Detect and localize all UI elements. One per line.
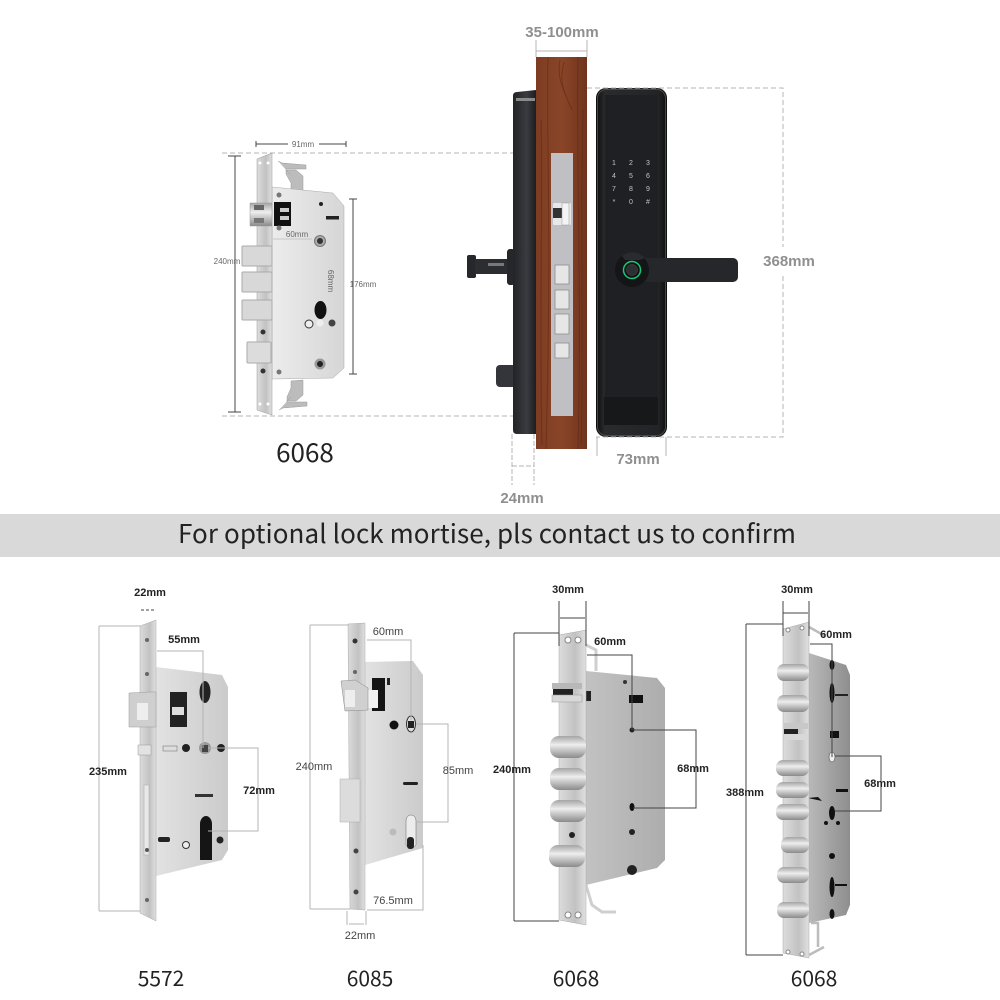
dimension: 176mm xyxy=(349,199,377,374)
fingerprint sensor xyxy=(624,262,640,278)
keypad digits: # xyxy=(646,199,650,206)
dimension: 30mm xyxy=(781,584,813,636)
icon: mortise 6085 case xyxy=(365,661,423,865)
dimension: 60mm xyxy=(810,629,852,757)
keypad digits: 5 xyxy=(629,173,633,180)
banner: optional lock mortise notice xyxy=(0,514,1000,557)
dimension: 22mm: 22mm xyxy=(345,930,375,942)
dimension: 55mm: 55mm xyxy=(168,634,200,646)
dimension: 85mm xyxy=(416,724,473,822)
dimension: 60mm xyxy=(587,636,632,730)
dimension: 22mm xyxy=(345,911,375,942)
diagram: lock mortise 6068 dimensions xyxy=(214,140,513,470)
mortise bolts xyxy=(555,265,569,358)
dimension: 60mm: 60mm xyxy=(820,629,852,641)
dimension: 68mm: 68mm xyxy=(677,763,709,775)
dimension: 240mm xyxy=(214,156,241,412)
dimension: 240mm xyxy=(296,625,350,909)
keypad digits: 6 xyxy=(646,173,650,180)
keypad digits: 0 xyxy=(629,199,633,206)
dimension: 388mm xyxy=(726,624,783,955)
dimension: 22mm: 22mm xyxy=(134,587,166,599)
dimension: 68mm xyxy=(835,756,896,811)
diagram: mortise 6085 xyxy=(296,623,473,993)
icon: case xyxy=(586,671,665,885)
keypad digits: 4 xyxy=(612,173,616,180)
diagram: mortise 6068 three-point xyxy=(493,584,709,993)
dimension: 72mm: 72mm xyxy=(243,785,275,797)
dimension: 60mm: 60mm xyxy=(373,626,403,638)
banner: optional lock mortise notice: For optional lock mortise, pls contact us to confirm xyxy=(178,514,796,551)
icon: hook latches xyxy=(586,645,616,912)
dimension: 30mm: 30mm xyxy=(552,584,584,596)
icon: mortise 5572 faceplate xyxy=(129,620,156,921)
dimension: 76.5mm: 76.5mm xyxy=(373,895,413,907)
dimension: 24mm xyxy=(500,434,544,507)
dimension: 22mm xyxy=(134,587,166,610)
keypad digits: 1 xyxy=(612,160,616,167)
label: 6068: 6068 xyxy=(791,963,837,993)
dimension: 35-100mm: 35-100mm xyxy=(525,24,599,41)
dimension: 72mm xyxy=(208,748,275,831)
icon: mortise 5572 case xyxy=(156,667,228,876)
dimension: 235mm: 235mm xyxy=(89,766,127,778)
dimension: 91mm: 91mm xyxy=(292,140,314,149)
dimension: 60mm: 60mm xyxy=(286,230,308,239)
dimension: 235mm xyxy=(89,626,140,911)
dimension: 35-100mm xyxy=(525,24,599,57)
dimension: 388mm: 388mm xyxy=(726,787,764,799)
icon: case xyxy=(808,653,850,923)
dimension: 73mm: 73mm xyxy=(616,451,660,468)
keypad digits: 2 xyxy=(629,160,633,167)
dimension: 60mm: 60mm xyxy=(594,636,626,648)
mortise slot plate xyxy=(551,153,573,416)
dimension: 240mm xyxy=(493,633,559,921)
diagram: smart lock side and front with door xyxy=(467,24,815,507)
dimension: 68mm: 68mm xyxy=(864,778,896,790)
dimension: 240mm: 240mm xyxy=(296,761,332,773)
icon: hook latches xyxy=(809,627,825,955)
icon: mortise 6085 faceplate xyxy=(340,623,368,910)
keypad digits xyxy=(612,160,650,206)
icon: rear panel with thumb turn xyxy=(467,90,536,434)
dimension: 85mm: 85mm xyxy=(443,765,473,777)
dimension: 176mm: 176mm xyxy=(350,280,377,289)
icon: faceplate and bolts xyxy=(549,630,586,925)
dimension: 73mm xyxy=(597,437,666,468)
label: 5572: 5572 xyxy=(138,963,184,993)
dimension: 68mm xyxy=(633,730,709,808)
dashed guide lines xyxy=(222,153,513,416)
keypad digits: 8 xyxy=(629,186,633,193)
dimension: 55mm xyxy=(157,634,203,748)
mortise latch xyxy=(553,203,571,225)
dimension: 91mm xyxy=(256,140,346,149)
keypad digits: * xyxy=(613,199,616,206)
label: 6068: 6068 xyxy=(276,433,334,470)
keypad digits: 3 xyxy=(646,160,650,167)
dimension: 240mm: 240mm xyxy=(214,257,241,266)
diagram: mortise 6068 multi-point xyxy=(726,584,896,993)
label: 6068: 6068 xyxy=(553,963,599,993)
dimension: 240mm: 240mm xyxy=(493,764,531,776)
icon: mortise 6068 case xyxy=(272,187,344,379)
icon: faceplate and bolts xyxy=(776,622,809,958)
icon: mortise 6068 latch hooks xyxy=(278,161,307,410)
diagram: mortise 5572 xyxy=(89,587,275,993)
dimension: 30mm: 30mm xyxy=(781,584,813,596)
dimension: 68mm: 68mm xyxy=(326,270,335,292)
icon: mortise 6068 faceplate and bolts xyxy=(242,153,272,415)
dimension: 24mm: 24mm xyxy=(500,490,544,507)
dimension: 368mm xyxy=(587,88,815,437)
dimension: 76.5mm xyxy=(367,845,423,910)
dimension: 30mm xyxy=(552,584,586,646)
icon: wooden door section xyxy=(536,57,587,449)
icon: front handle panel xyxy=(596,88,738,437)
keypad digits: 7 xyxy=(612,186,616,193)
dimension: 368mm: 368mm xyxy=(763,253,815,270)
lever handle xyxy=(615,252,738,287)
dimension: 60mm xyxy=(367,626,411,720)
keypad digits: 9 xyxy=(646,186,650,193)
label: 6085: 6085 xyxy=(347,963,393,993)
